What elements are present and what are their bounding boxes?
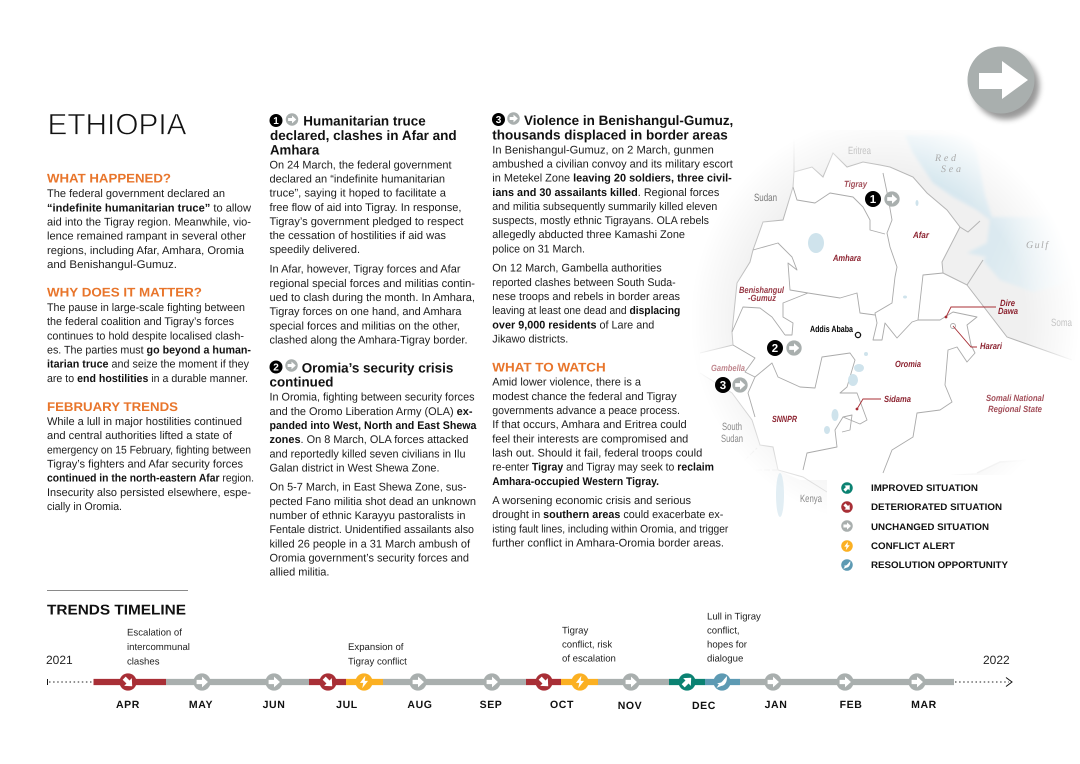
text: what to watch: re-enter Tigray and Tigray may seek to reclaim xyxy=(492,462,714,474)
text: item 3: allegedly abducted three Kamashi Zone xyxy=(492,229,685,241)
text: item 1: free flow of aid into Tigray. In response, xyxy=(270,202,462,214)
text: what to watch xyxy=(492,377,714,488)
region labels: Sudan xyxy=(721,433,743,445)
annotation: April xyxy=(127,628,190,668)
lakes xyxy=(776,200,918,517)
region labels: Red xyxy=(934,153,957,164)
text: what to watch: Amid lower violence, there is a xyxy=(492,377,642,389)
text: February trends: Insecurity also persisted elsewhere, espe- xyxy=(47,487,251,499)
text: item 3: suspects, mostly ethnic Tigrayans. OLA rebels xyxy=(492,215,709,227)
text: item 2: and reportedly killed seven civilians in Ilu xyxy=(270,448,466,460)
text: East Shewa: Fentale district. Unidentified assailants also xyxy=(270,524,474,536)
region labels: Afar xyxy=(912,230,929,240)
region labels: Dawa xyxy=(998,306,1018,316)
text: Gambella: leaving at least one dead and displacing xyxy=(492,305,680,317)
text: item 2: panded into West, North and East Shewa xyxy=(270,420,477,432)
annotation: July: Expansion of xyxy=(348,642,404,653)
map markers xyxy=(715,191,900,393)
region labels: South xyxy=(722,421,742,433)
text: item 1: speedily delivered. xyxy=(270,244,360,256)
text: item 2: and the Oromo Liberation Army (OLA) ex- xyxy=(270,406,473,418)
region labels: Sea xyxy=(941,164,961,175)
heading: February trends: FEBRUARY TRENDS xyxy=(47,400,178,414)
text: what to watch: governments advance a peace process. xyxy=(492,405,680,417)
text: February trends: and central authorities lifted a state of xyxy=(47,430,233,442)
text: what to watch: If that occurs, Amhara and Eritrea could xyxy=(492,419,687,431)
text: Gambella: On 12 March, Gambella authorities xyxy=(492,263,662,275)
legend xyxy=(841,482,1009,571)
timeline: 2021 xyxy=(46,653,73,667)
heading: item 1: Amhara xyxy=(270,142,320,157)
map markers: 3 xyxy=(720,380,726,392)
heading: item 3: thousands displaced in border areas xyxy=(492,127,728,142)
text: why does it matter: es. The parties must go beyond a human- xyxy=(47,344,251,356)
timeline: JUL xyxy=(336,699,358,711)
text: item 3: and militia subsequently summarily killed eleven xyxy=(492,201,717,213)
timeline: FEB xyxy=(840,699,862,711)
text: item 3: ambushed a civilian convoy and its military escort xyxy=(492,158,733,170)
leader lines xyxy=(857,307,996,409)
annotation: October xyxy=(562,626,616,664)
text: East Shewa: Oromia government’s security forces and xyxy=(270,552,469,564)
text: Afar and Amhara: clashed along the Amhara-Tigray border. xyxy=(270,334,468,346)
text: East Shewa: allied militia. xyxy=(270,567,330,579)
text: economic crisis: drought in southern areas could exacerbate ex- xyxy=(492,509,724,521)
icon: item 2 marker: 2 xyxy=(273,362,279,374)
region labels: Harari xyxy=(980,341,1002,351)
text: item 3 xyxy=(492,144,733,255)
text: item 1: On 24 March, the federal government xyxy=(270,159,452,171)
text: what happened: and Benishangul-Gumuz. xyxy=(47,259,177,271)
text: item 3: In Benishangul-Gumuz, on 2 March, gunmen xyxy=(492,144,714,156)
text: item 3: in Metekel Zone leaving 20 soldiers, three civil- xyxy=(492,173,732,185)
timeline: MAY xyxy=(189,699,213,711)
text: economic crisis xyxy=(492,495,729,549)
text: item 1: truce”, saying it hoped to facilitate a xyxy=(270,188,447,200)
region labels: Soma xyxy=(1051,317,1072,329)
text: what happened: regions, including Afar, Amhara, Oromia xyxy=(47,245,245,257)
text: what to watch: modest chance the federal and Tigray xyxy=(492,391,677,403)
region labels: Gulf xyxy=(1026,240,1049,251)
text: Gambella: reported clashes between South Suda- xyxy=(492,277,676,289)
region labels: Tigray xyxy=(844,179,868,189)
legend: RESOLUTION OPPORTUNITY xyxy=(871,560,1009,571)
heading: item 3: Violence in Benishangul-Gumuz, xyxy=(524,113,733,128)
icon: item 2 marker xyxy=(270,359,298,374)
text: Afar and Amhara: In Afar, however, Tigray forces and Afar xyxy=(270,264,461,276)
heading: what happened: WHAT HAPPENED? xyxy=(47,171,171,185)
capital marker xyxy=(855,332,861,338)
region labels: SNNPR xyxy=(772,414,797,424)
text: East Shewa: number of ethnic Karayyu pastoralists in xyxy=(270,510,466,522)
heading: item 2: continued xyxy=(270,375,334,390)
text: Afar and Amhara xyxy=(270,264,475,346)
title: ETHIOPIA xyxy=(48,108,186,141)
text: economic crisis: further conflict in Amhara-Oromia border areas. xyxy=(492,537,724,549)
region labels: Regional State xyxy=(988,404,1042,414)
text: East Shewa: pected Fano militia shot dead an unknown xyxy=(270,496,476,508)
region labels: Sudan xyxy=(754,192,777,204)
text: Afar and Amhara: regional special forces and militias contin- xyxy=(270,278,475,290)
legend: DETERIORATED SITUATION xyxy=(871,502,1002,513)
heading: why does it matter: WHY DOES IT MATTER? xyxy=(47,286,202,300)
region labels: Gambella xyxy=(711,363,745,373)
text: item 1: the cessation of hostilities if aid was xyxy=(270,230,446,242)
region labels: Dire xyxy=(1000,298,1015,308)
text: what happened: “indefinite humanitarian truce” to allow xyxy=(47,202,252,214)
heading: item 3 xyxy=(492,113,733,142)
icon: item 3 marker: 3 xyxy=(496,115,502,126)
legend: UNCHANGED SITUATION xyxy=(871,522,989,533)
annotation: July xyxy=(348,642,407,668)
heading: item 1: declared, clashes in Afar and xyxy=(270,128,457,143)
heading: item 1: Humanitarian truce xyxy=(303,114,426,129)
text: item 2: Galan district in West Shewa Zone. xyxy=(270,462,440,474)
text: what to watch: feel their interests are compromised and xyxy=(492,433,688,445)
text: East Shewa: killed 26 people in a 31 March ambush of xyxy=(270,538,471,550)
region labels: Sidama xyxy=(884,394,911,404)
annotation: December: dialogue xyxy=(707,654,743,664)
text: what happened: lence remained rampant in several other xyxy=(47,231,246,243)
text: what to watch: lash out. Should it fail, federal troops could xyxy=(492,447,702,459)
timeline: JUN xyxy=(263,699,285,711)
text: item 3: ians and 30 assailants killed. Regional forces xyxy=(492,187,720,199)
timeline: DEC xyxy=(692,700,716,712)
text: February trends: While a lull in major hostilities continued xyxy=(47,416,242,428)
annotation: October: of escalation xyxy=(562,654,616,664)
text: East Shewa xyxy=(270,482,476,579)
heading: item 2: Oromia’s security crisis xyxy=(302,360,453,376)
timeline: JAN xyxy=(765,699,787,711)
annotation: July: Tigray conflict xyxy=(348,656,407,668)
text: why does it matter: are to end hostilities in a durable manner. xyxy=(47,373,248,385)
text: economic crisis: isting fault lines, including within Oromia, and trigger xyxy=(492,523,729,535)
timeline: OCT xyxy=(550,699,574,711)
region labels xyxy=(711,145,1072,505)
region labels: Benishangul xyxy=(739,285,784,295)
text: item 2: zones. On 8 March, OLA forces attacked xyxy=(270,434,468,446)
text: Gambella xyxy=(492,263,680,345)
regional borders xyxy=(732,173,977,473)
text: why does it matter: The pause in large-scale fighting between xyxy=(47,302,245,314)
region labels: Oromia xyxy=(895,359,921,369)
text: February trends: Tigray’s fighters and Afar security forces xyxy=(47,458,243,470)
map of Ethiopia xyxy=(700,135,1072,517)
white box behind legend xyxy=(827,475,1080,595)
column: numbered items 1 and 2 xyxy=(270,113,477,579)
text: item 1: declared an “indefinite humanitarian xyxy=(270,173,445,185)
text: item 2 xyxy=(270,392,477,474)
heading: trends timeline: TRENDS TIMELINE xyxy=(47,602,186,618)
text: Gambella: nese troops and rebels in border areas xyxy=(492,291,680,303)
text: what happened: aid into the Tigray region. Meanwhile, vio- xyxy=(47,216,251,228)
text: item 1: Tigray’s government pledged to respect xyxy=(270,216,464,228)
legend: CONFLICT ALERT xyxy=(871,541,955,552)
annotation: December xyxy=(707,612,761,664)
icon: item 3 marker xyxy=(492,112,520,126)
text: February trends: continued in the north-eastern Afar region. xyxy=(47,473,254,485)
text: economic crisis: A worsening economic crisis and serious xyxy=(492,495,691,507)
text: February trends xyxy=(47,416,254,513)
timeline: 2022 xyxy=(983,653,1010,667)
annotation: December: hopes for xyxy=(707,640,748,650)
annotation: October: conflict, risk xyxy=(562,640,612,650)
column: item 3 and what to watch xyxy=(492,112,733,549)
column: what happened, why it matters, February trends xyxy=(47,171,254,513)
region labels: Addis Ababa xyxy=(810,324,854,334)
text: February trends: emergency on 15 February, fighting between xyxy=(47,444,251,456)
text: why does it matter: itarian truce and seize the moment if they xyxy=(47,359,249,371)
map markers: 2 xyxy=(772,343,778,355)
text: February trends: cially in Oromia. xyxy=(47,501,122,513)
region labels: Somali National xyxy=(986,393,1044,403)
annotation: October: Tigray xyxy=(562,626,589,636)
region labels: Eritrea xyxy=(848,145,871,157)
timeline: APR xyxy=(116,699,140,711)
legend: IMPROVED SITUATION xyxy=(871,483,978,494)
annotation: December: conflict, xyxy=(707,626,740,636)
region labels: Kenya xyxy=(800,493,822,505)
text: item 1 xyxy=(270,159,464,256)
timeline: SEP xyxy=(480,699,502,711)
annotation: April: intercommunal xyxy=(127,642,190,653)
text: what to watch: Amhara-occupied Western Tigray. xyxy=(492,476,659,488)
text: item 3: police on 31 March. xyxy=(492,243,585,255)
heading: item 2 xyxy=(270,360,453,390)
text: Gambella: over 9,000 residents of Lare and xyxy=(492,319,654,331)
heading: what to watch: WHAT TO WATCH xyxy=(492,361,606,375)
region labels: -Gumuz xyxy=(748,293,776,303)
text: Afar and Amhara: ued to clash during the month. In Amhara, xyxy=(270,292,475,304)
icon: item 1 marker xyxy=(270,113,298,127)
text: Afar and Amhara: special forces and militias on the other, xyxy=(270,320,460,332)
timeline: AUG xyxy=(407,699,433,711)
text: why does it matter: the federal coalition and Tigray’s forces xyxy=(47,316,234,328)
text: why does it matter: continues to hold despite localised clash- xyxy=(47,330,244,342)
text: what happened xyxy=(47,188,252,271)
text: why does it matter xyxy=(47,302,251,385)
icon: big unchanged-situation arrow xyxy=(968,46,1040,120)
annotation: April: Escalation of xyxy=(127,628,182,638)
text: East Shewa: On 5-7 March, in East Shewa Zone, sus- xyxy=(270,482,467,494)
region labels: Amhara xyxy=(832,253,861,263)
annotation: April: clashes xyxy=(127,656,160,668)
text: item 2: In Oromia, fighting between security forces xyxy=(270,392,475,404)
text: Gambella: Jikawo districts. xyxy=(492,333,568,345)
timeline xyxy=(46,653,1012,712)
timeline: MAR xyxy=(911,699,937,711)
text: what happened: The federal government declared an xyxy=(47,188,225,200)
text: Afar and Amhara: Tigray forces on one hand, and Amhara xyxy=(270,306,462,318)
timeline: NOV xyxy=(618,700,642,712)
map markers: 1 xyxy=(870,194,877,206)
heading: item 1 xyxy=(270,114,457,157)
icon: item 1 marker: 1 xyxy=(273,116,279,127)
annotation: December: Lull in Tigray xyxy=(707,612,761,622)
